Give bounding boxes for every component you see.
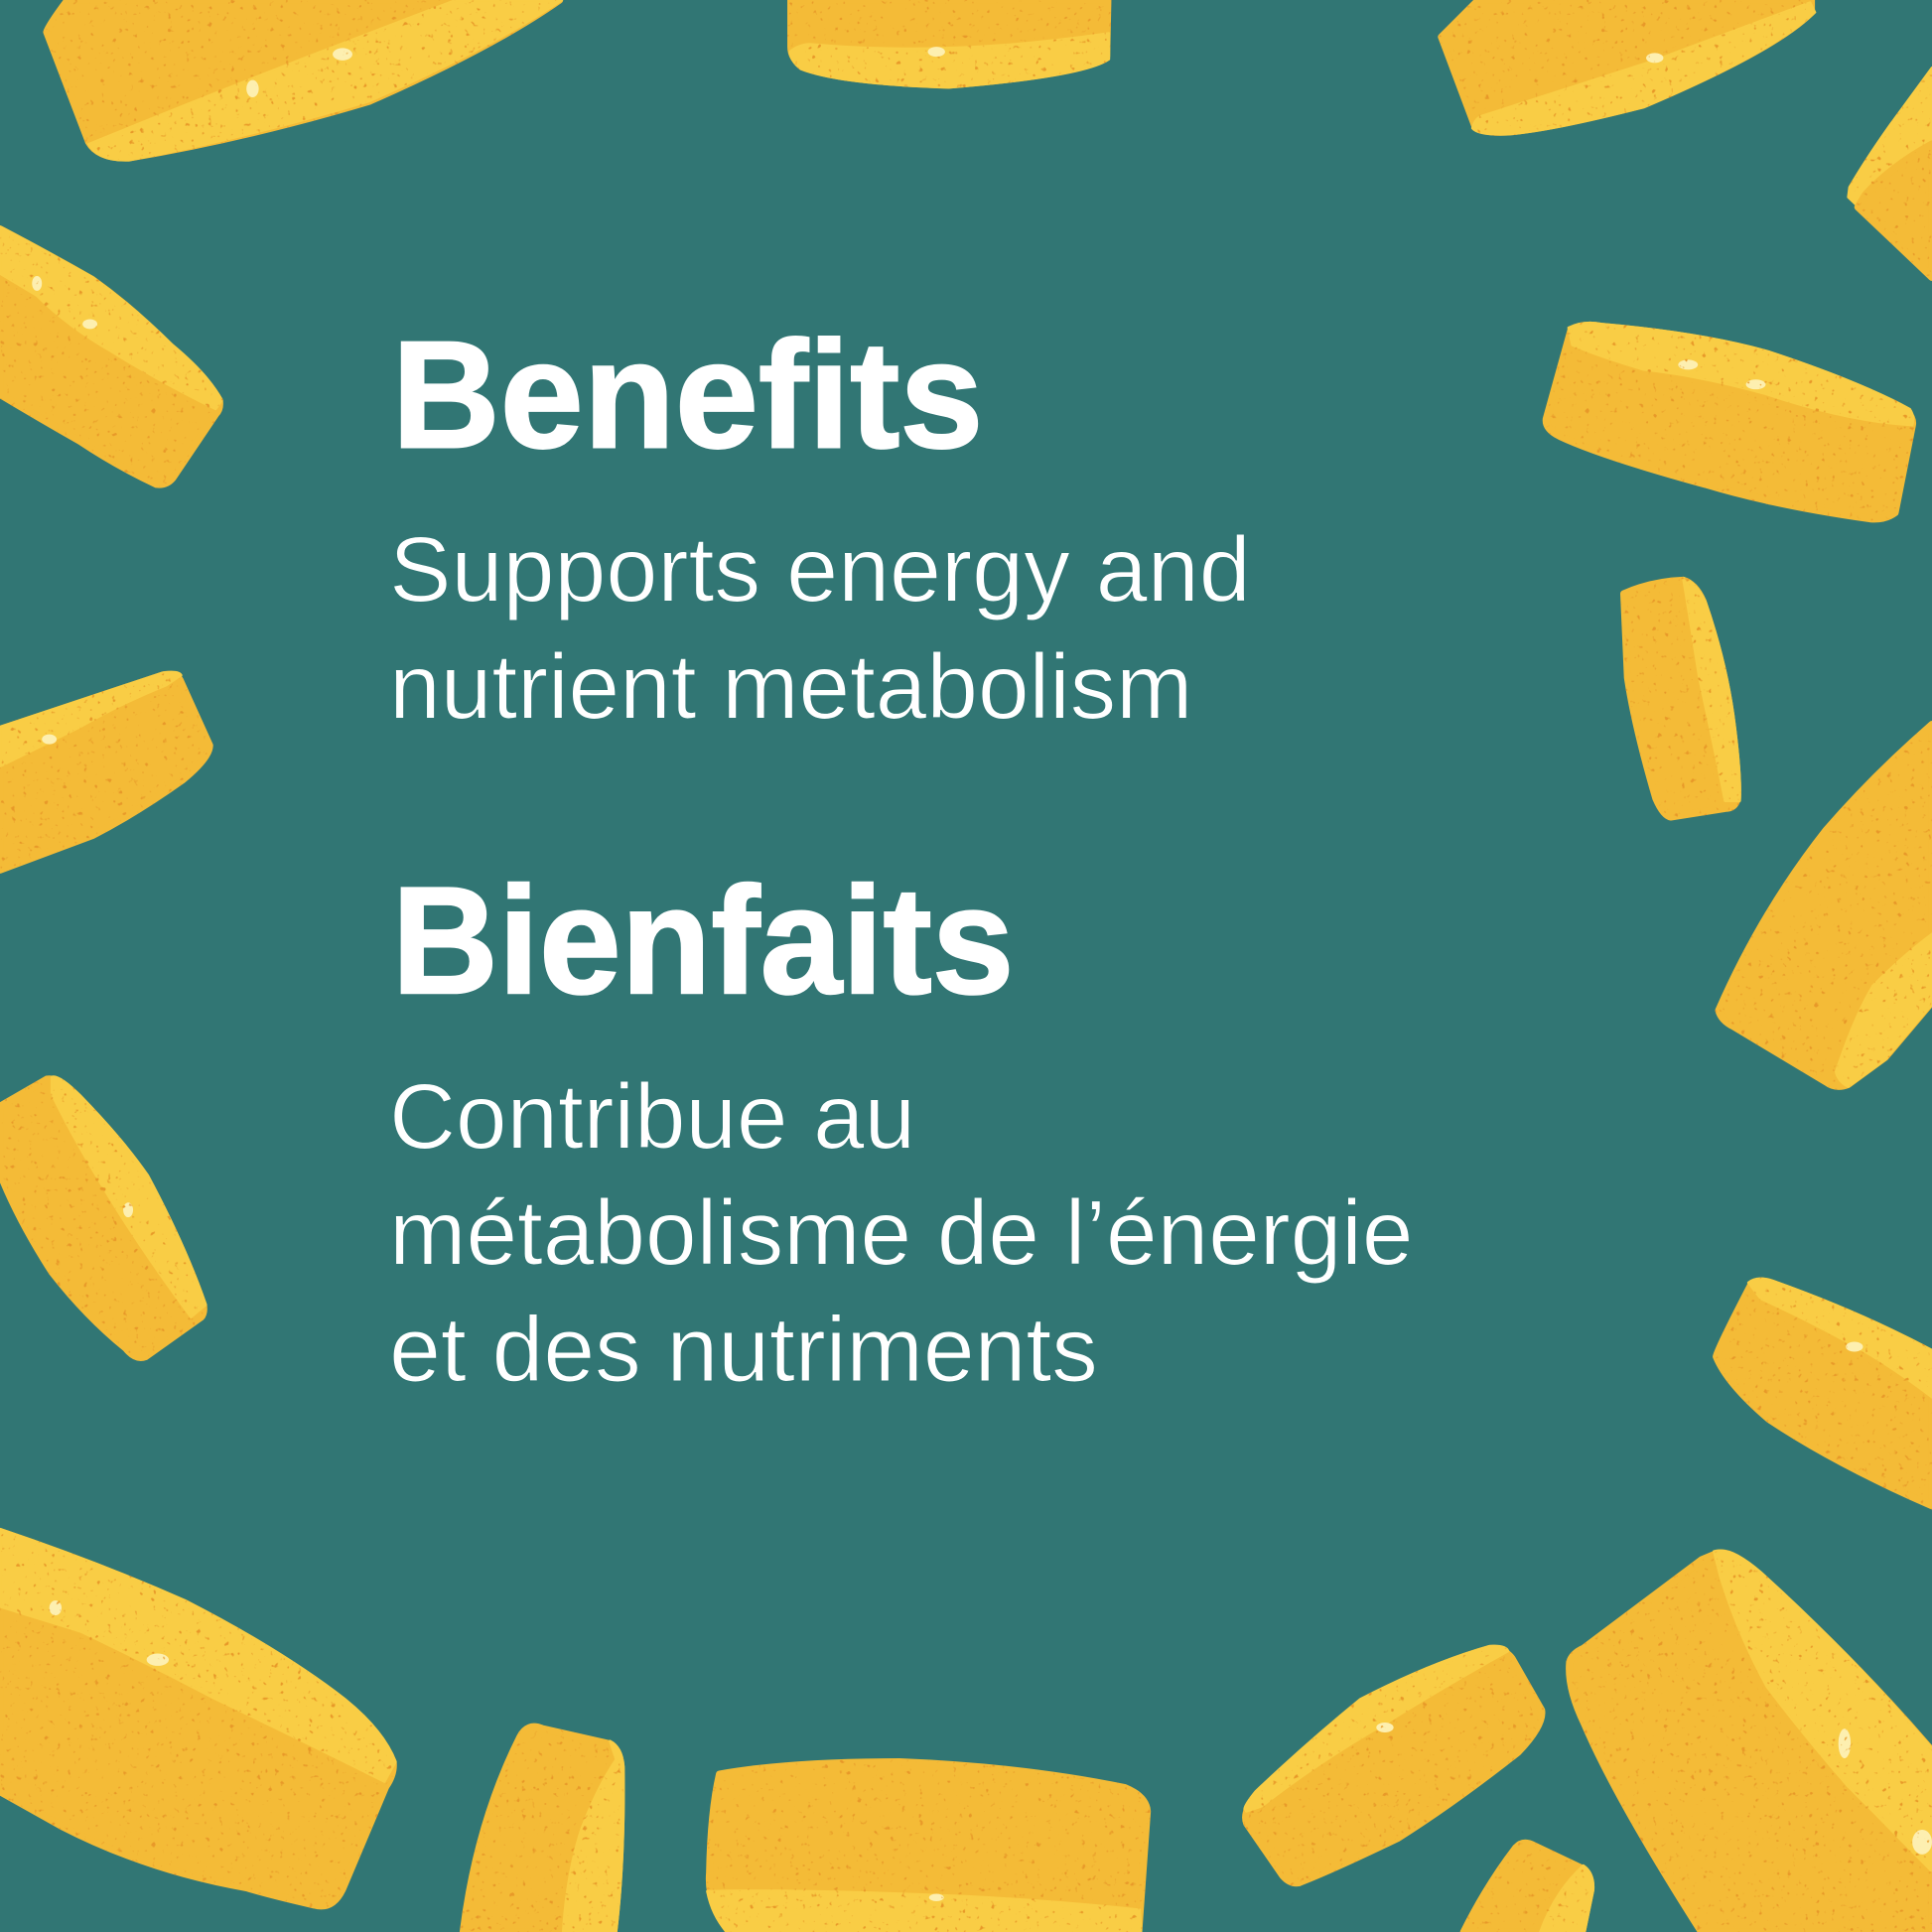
text block: English benefit: Supports energy and bbox=[389, 518, 1251, 621]
tablet: left upper bbox=[0, 226, 221, 484]
tablet: bottom right centre bbox=[1245, 1646, 1542, 1883]
tablet: right middle bbox=[1546, 323, 1913, 519]
tablet: top right bbox=[1442, 0, 1815, 134]
tablet: right lower bbox=[1717, 1279, 1932, 1506]
tablet: bottom small bbox=[1463, 1844, 1593, 1932]
tablet: top centre bbox=[790, 0, 1109, 87]
text block: French benefit: métabolisme de l’énergie bbox=[389, 1180, 1414, 1284]
tablet: small right bbox=[1624, 578, 1740, 817]
tablet: bottom left small bbox=[464, 1726, 623, 1932]
tablet: bottom right large bbox=[1570, 1551, 1932, 1932]
tablet: top left bbox=[47, 0, 562, 160]
tablet: right large bbox=[1719, 725, 1932, 1087]
tablet: bottom left large bbox=[0, 1529, 395, 1906]
text block: French benefit bbox=[389, 1065, 1414, 1401]
heading: Bienfaits: Bienfaits bbox=[392, 855, 1014, 1026]
text block: English benefit: nutrient metabolism bbox=[389, 635, 1192, 739]
heading: Benefits: Benefits bbox=[392, 310, 983, 481]
tablet: left lower bbox=[0, 1076, 206, 1357]
text block: French benefit: et des nutriments bbox=[389, 1298, 1098, 1401]
text block: French benefit: Contribue au bbox=[389, 1065, 915, 1169]
tablet: bottom centre bbox=[707, 1762, 1147, 1932]
tablet: far right upper bbox=[1849, 68, 1932, 277]
tablet: left middle bbox=[0, 672, 209, 870]
text block: English benefit bbox=[389, 518, 1251, 739]
